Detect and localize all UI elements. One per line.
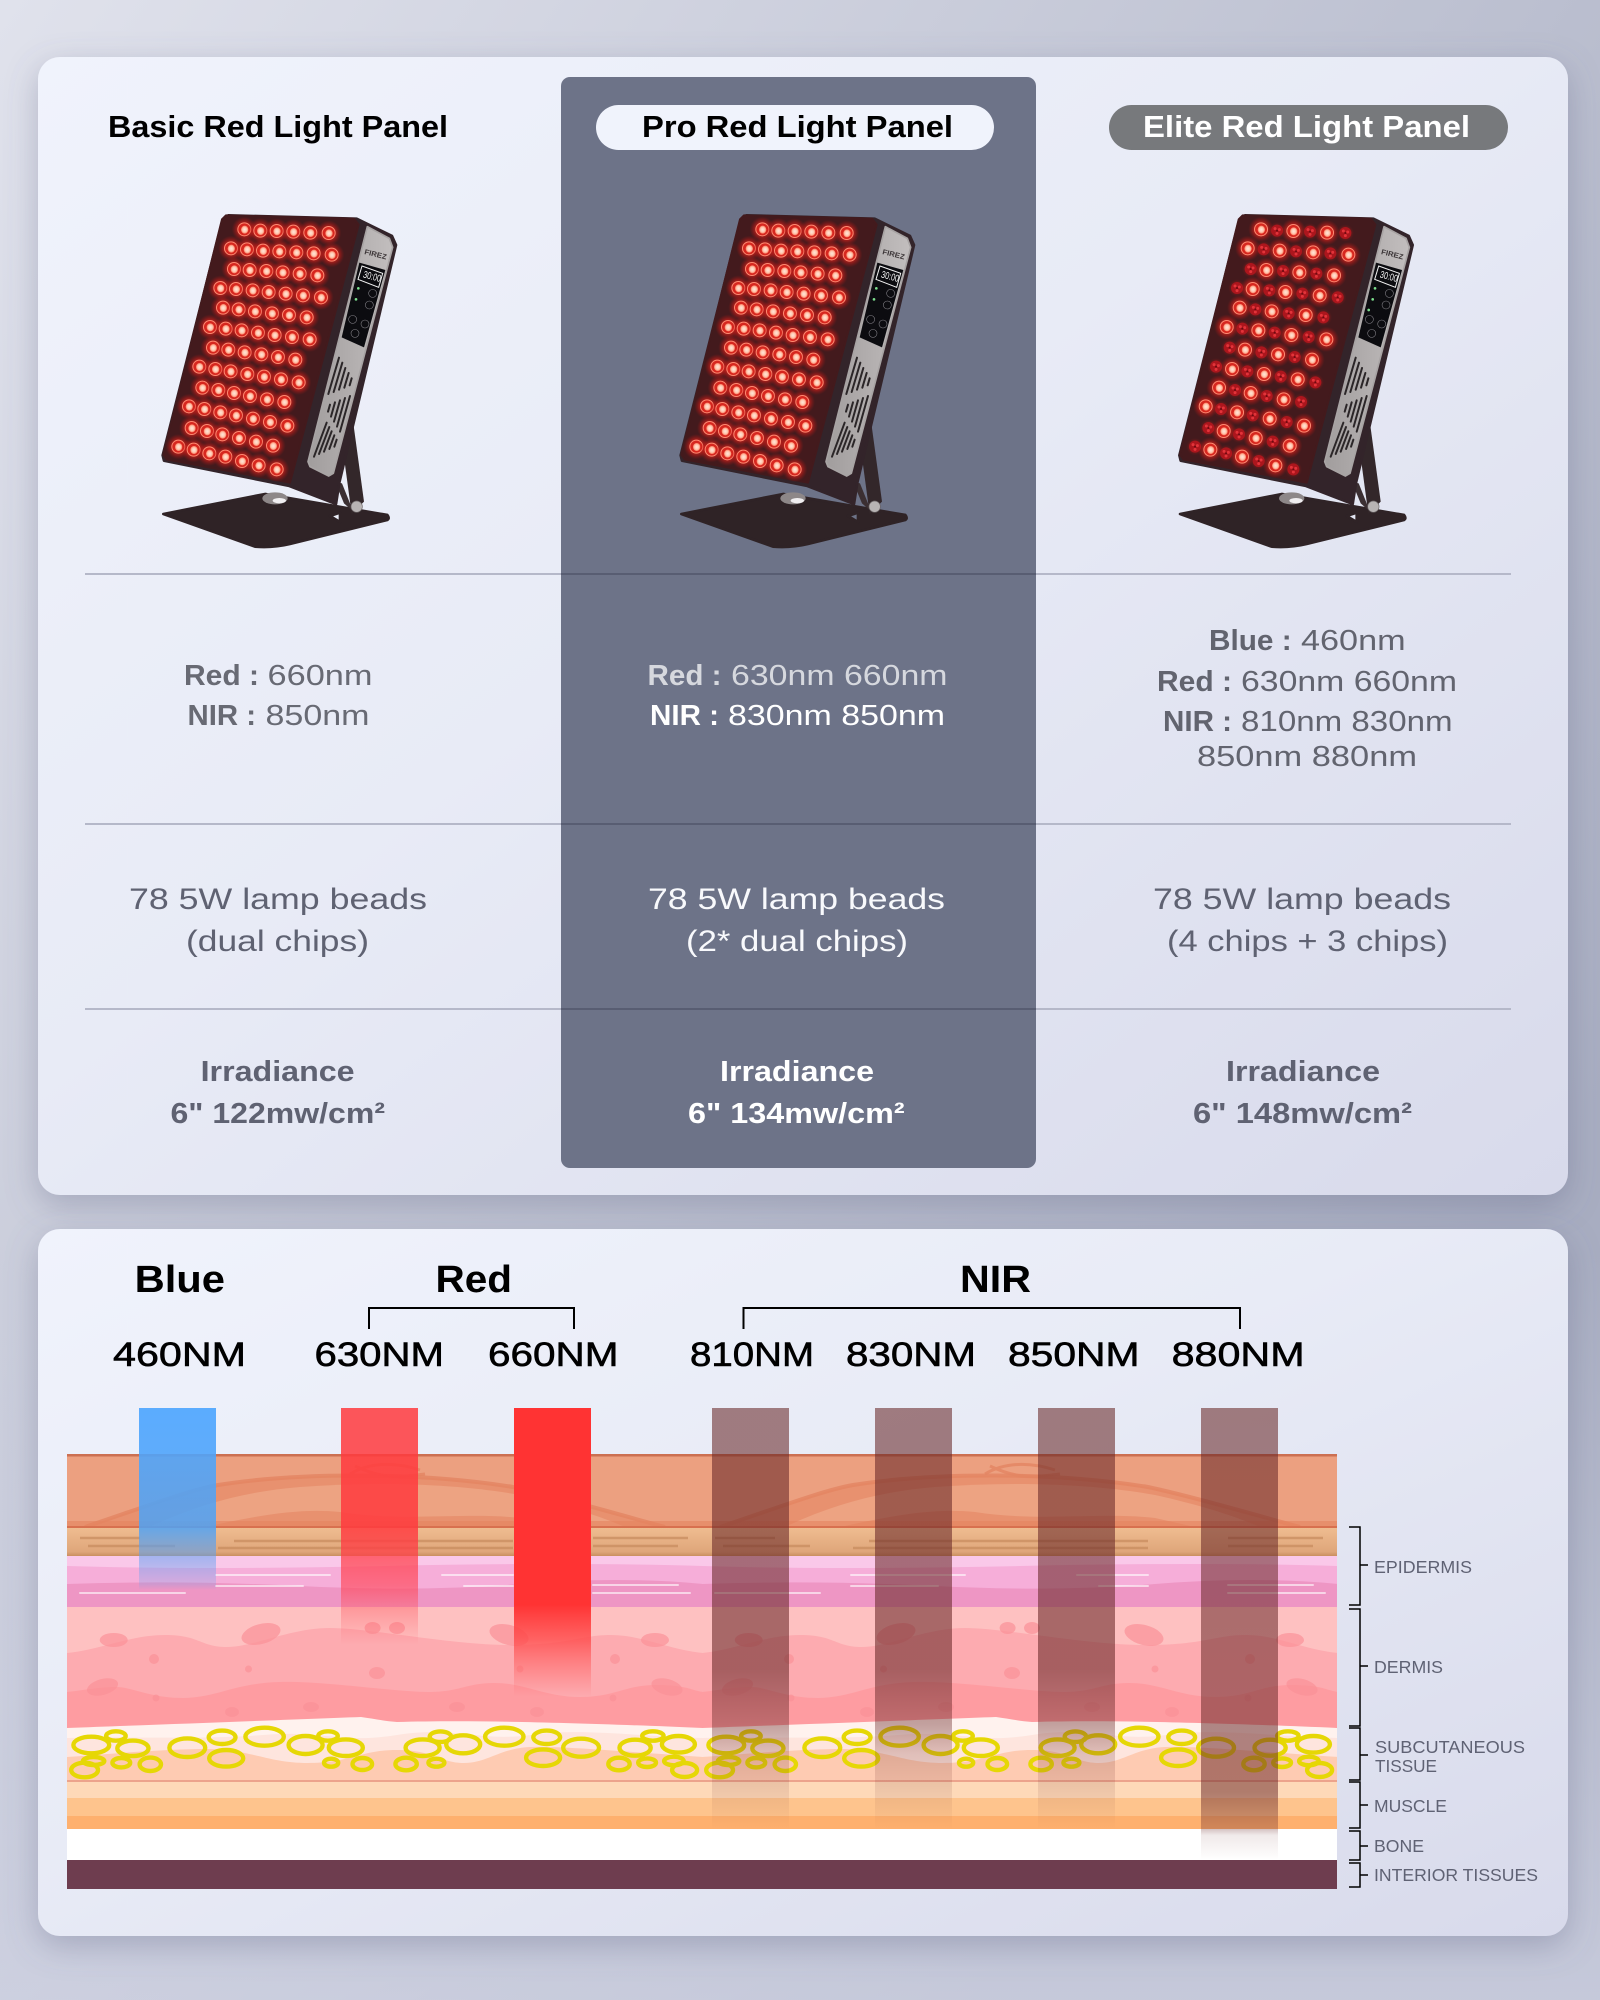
wavelengths: Elite: 850nm 880nm: [1197, 741, 1417, 773]
irradiance: Basic: [170, 1056, 385, 1130]
light beam: 830nm NIR: [875, 1408, 952, 1830]
panel background: [38, 57, 1568, 1195]
wavelengths: Elite: 460nm: [1301, 625, 1406, 657]
highlighted Pro column: [561, 77, 1036, 1168]
wavelengths: Pro: NIR :: [650, 700, 719, 732]
group heading: NIR with bracket: NIR: [960, 1259, 1031, 1301]
layer bracket and label: interior tissues: INTERIOR TISSUES: [1374, 1865, 1538, 1885]
wavelengths: Basic: 660nm: [268, 660, 372, 692]
wavelengths: Basic: 850nm: [266, 700, 370, 732]
wavelength labels: 630NM: [314, 1336, 444, 1374]
light beam: 880nm NIR: [1201, 1408, 1278, 1860]
layer bracket and label: epidermis: [1349, 1527, 1472, 1605]
wavelengths: Elite: Red :: [1157, 666, 1232, 698]
wavelength labels: 880NM: [1172, 1336, 1305, 1374]
wavelengths: Elite: Blue :: [1209, 625, 1292, 657]
light beam: 460nm blue: [139, 1408, 216, 1590]
light beam: 630nm red: [341, 1408, 418, 1645]
product image: Pro lamp: FIREZ: [882, 247, 906, 262]
light beam: 850nm NIR: [1038, 1408, 1115, 1830]
wavelengths: Basic: NIR :: [188, 700, 256, 732]
layer bracket and label: dermis: [1349, 1609, 1443, 1726]
lamp beads: Basic: [129, 883, 427, 958]
lamp beads: Pro: 78 5W lamp beads: [648, 883, 945, 916]
wavelength labels: 660NM: [488, 1336, 618, 1374]
layer bracket and label: muscle: [1349, 1782, 1447, 1828]
heading: Basic Red Light Panel: Basic Red Light Panel: [108, 109, 448, 144]
group heading: Red with bracket: [369, 1259, 574, 1329]
layer bracket and label: muscle: MUSCLE: [1374, 1796, 1447, 1816]
product image: Pro lamp: [681, 215, 914, 547]
layer bracket and label: subcutaneous tissue: SUBCUTANEOUS: [1375, 1737, 1525, 1757]
irradiance: Pro: [688, 1056, 905, 1130]
heading: Pro Red Light Panel pill: [596, 105, 994, 150]
wavelength labels: [113, 1336, 1305, 1374]
lamp beads: Pro: (2* dual chips): [686, 925, 908, 958]
product image: Elite lamp: [1179, 215, 1413, 547]
irradiance: Basic: 6" 122mw/cm²: [170, 1098, 385, 1130]
wavelengths: Basic: [184, 660, 372, 732]
lamp beads: Basic: (dual chips): [186, 925, 369, 958]
wavelengths: Elite: 810nm 830nm: [1241, 706, 1453, 738]
product image: Elite lamp: 30:00: [1379, 270, 1399, 285]
heading: Elite Red Light Panel pill: Elite Red Light Panel: [1143, 109, 1470, 144]
layer bracket and label: subcutaneous tissue: [1349, 1728, 1525, 1780]
wavelengths: Pro: 830nm 850nm: [728, 700, 945, 732]
wavelength labels: 460NM: [113, 1336, 246, 1374]
wavelengths: Elite: [1157, 625, 1457, 773]
layer bracket and label: epidermis: EPIDERMIS: [1374, 1557, 1472, 1577]
group heading: Red with bracket: Red: [436, 1259, 512, 1301]
irradiance: Elite: Irradiance: [1226, 1056, 1380, 1088]
wavelengths: Elite: NIR :: [1163, 706, 1232, 738]
product image: Basic lamp: 30:00: [362, 270, 382, 285]
irradiance: Pro: 6" 134mw/cm²: [688, 1098, 905, 1130]
product image: Pro lamp: 30:00: [880, 270, 900, 285]
irradiance: Basic: Irradiance: [201, 1056, 355, 1088]
lamp beads: Basic: 78 5W lamp beads: [129, 883, 427, 916]
group heading: Blue: Blue: [135, 1259, 225, 1301]
panel: skin penetration diagram: [38, 1229, 1568, 1936]
wavelength labels: 830NM: [846, 1336, 976, 1374]
wavelengths: Pro: Red :: [648, 660, 722, 692]
wavelengths: Basic: Red :: [184, 660, 259, 692]
heading: Pro Red Light Panel pill: Pro Red Light Panel: [642, 109, 953, 144]
light beam: 660nm red: [514, 1408, 591, 1697]
wavelength labels: 810NM: [690, 1336, 814, 1374]
light beam: 810nm NIR: [712, 1408, 789, 1830]
lamp beads: Elite: [1153, 883, 1451, 958]
heading: Elite Red Light Panel pill: [1109, 105, 1508, 150]
layer bracket and label: bone: [1349, 1831, 1424, 1860]
product image: Elite lamp: FIREZ: [1380, 247, 1405, 262]
lamp beads: Elite: (4 chips + 3 chips): [1167, 925, 1448, 958]
irradiance: Elite: 6" 148mw/cm²: [1193, 1098, 1412, 1130]
layer bracket and label: dermis: DERMIS: [1374, 1657, 1443, 1677]
lamp beads: Pro: [648, 883, 945, 958]
group heading: NIR with bracket: [744, 1259, 1240, 1329]
layer bracket and label: bone: BONE: [1374, 1836, 1424, 1856]
panel background: [38, 1229, 1568, 1936]
wavelengths: Elite: 630nm 660nm: [1241, 666, 1457, 698]
product image: Basic lamp: [163, 215, 396, 547]
wavelength labels: 850NM: [1008, 1336, 1140, 1374]
wavelengths: Pro: 630nm 660nm: [731, 660, 948, 692]
product image: Basic lamp: FIREZ: [364, 247, 388, 262]
wavelengths: Pro: [648, 660, 948, 732]
irradiance: Elite: [1193, 1056, 1412, 1130]
panel: product comparison: [38, 57, 1568, 1195]
lamp beads: Elite: 78 5W lamp beads: [1153, 883, 1451, 916]
skin cross-section layers: [67, 1454, 1338, 1889]
irradiance: Pro: Irradiance: [720, 1056, 874, 1088]
layer bracket and label: subcutaneous tissue: TISSUE: [1375, 1756, 1437, 1776]
